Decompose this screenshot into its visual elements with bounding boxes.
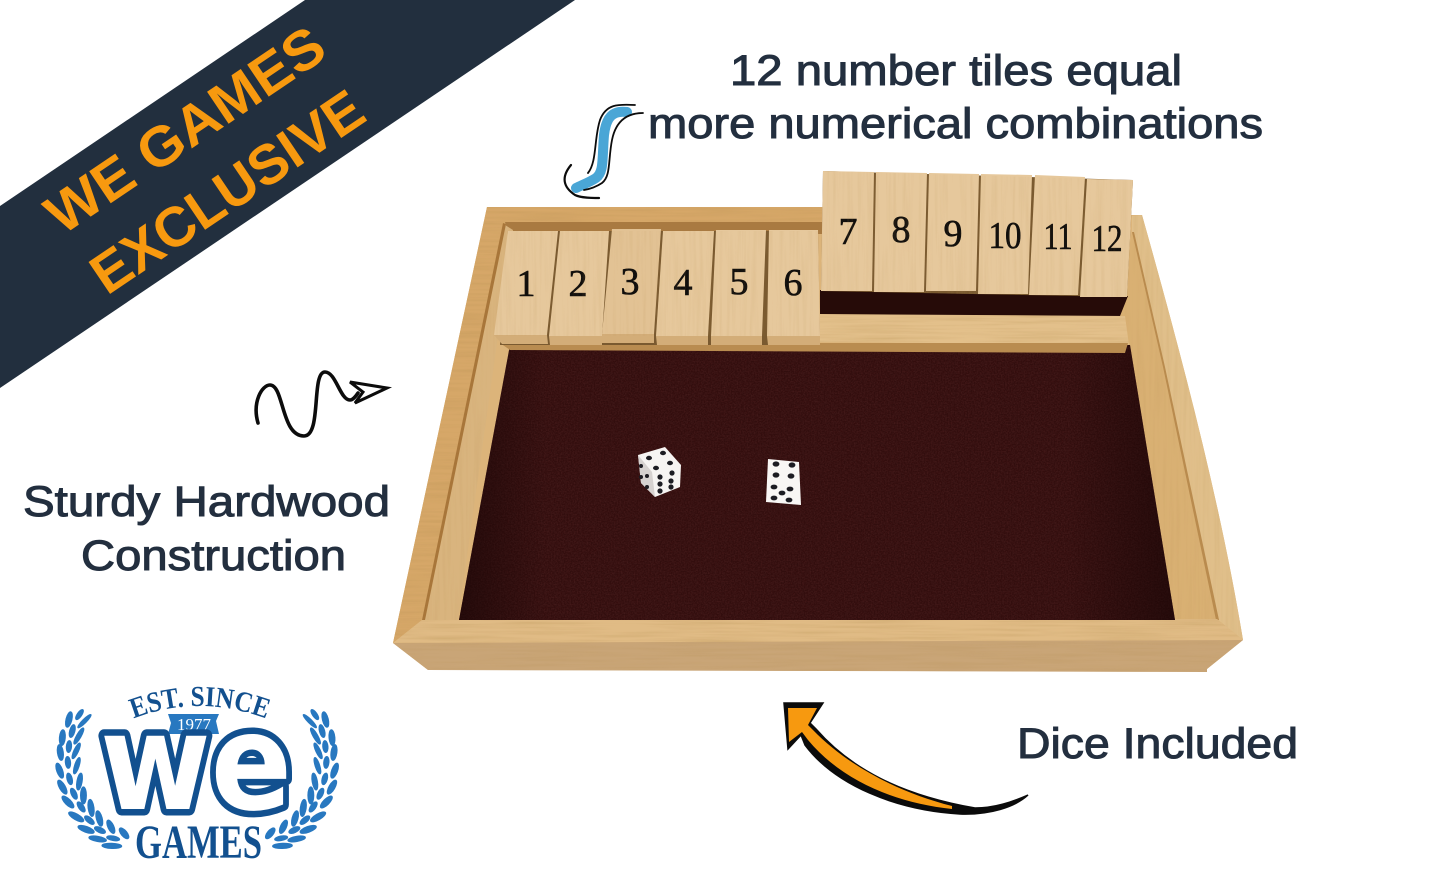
tile 6: 6 <box>784 262 802 304</box>
tile 6 <box>767 230 820 345</box>
tile 2 <box>549 231 609 345</box>
box: felt channel behind rail <box>820 290 1128 316</box>
arrow: orange curved <box>784 703 1028 814</box>
logo: laurel left <box>54 708 131 849</box>
tile 12: 12 <box>1092 218 1122 260</box>
tile 11: 11 <box>1044 216 1072 258</box>
logo: WE Games <box>55 685 339 869</box>
game box <box>393 171 1243 672</box>
tile 7 <box>821 171 874 291</box>
tile 8 <box>874 172 927 292</box>
die left <box>638 447 681 497</box>
logo: est since: EST. SINCE <box>128 686 270 718</box>
tile 5: 5 <box>730 261 748 303</box>
logo: we wordmark: we <box>100 685 292 841</box>
tile 10 <box>978 174 1032 294</box>
logo: games: GAMES <box>135 816 262 869</box>
callout: dice included: Dice Included <box>1017 720 1298 768</box>
callout: sturdy hardwood <box>23 478 390 580</box>
tile 2: 2 <box>568 263 588 305</box>
tile 10: 10 <box>988 215 1022 257</box>
box: divider rail <box>500 314 1129 353</box>
box: left inner rail <box>422 225 513 620</box>
tile 12 <box>1080 179 1133 297</box>
box: right wall <box>1132 215 1243 640</box>
banner text: second line: EXCLUSIVE <box>78 77 376 306</box>
tile 5 <box>711 230 766 345</box>
tile 4 <box>656 231 714 345</box>
tile 9 <box>926 173 979 291</box>
tile 4: 4 <box>674 262 692 304</box>
tile 1 <box>494 231 558 344</box>
callout: sturdy hardwood: Construction <box>81 532 346 580</box>
wood grain on tiles <box>494 171 1133 336</box>
tile 9: 9 <box>944 213 962 255</box>
tile 1: 1 <box>516 263 536 305</box>
box: frame <box>393 207 1243 672</box>
heading: 12 number tiles <box>648 47 1263 148</box>
logo: 1977 ribbon <box>168 714 219 734</box>
box: front rail top <box>393 619 1243 643</box>
tiles standing 7-12 <box>821 171 1133 297</box>
tile 3 <box>602 229 661 343</box>
tile 3: 3 <box>620 261 640 303</box>
box: front face <box>393 640 1243 672</box>
heading: 12 number tiles: more numerical combinations <box>648 100 1263 148</box>
heading: 12 number tiles: 12 number tiles equal <box>730 47 1182 95</box>
banner text: first line: WE GAMES <box>33 13 336 246</box>
logo: 1977 ribbon: 1977 <box>177 715 212 734</box>
tile 7: 7 <box>838 211 858 253</box>
logo: laurel right <box>264 708 340 849</box>
tile 11 <box>1029 175 1085 295</box>
arrow: blue squiggle <box>565 105 643 198</box>
tile 8: 8 <box>892 209 910 251</box>
callout: sturdy hardwood: Sturdy Hardwood <box>23 478 390 526</box>
tiles lying down 1-6 <box>494 229 820 345</box>
box: felt playing area <box>459 345 1175 620</box>
banner: WE Games exclusive <box>0 0 575 388</box>
arrow: black squiggle <box>256 372 387 436</box>
die right <box>766 459 801 505</box>
